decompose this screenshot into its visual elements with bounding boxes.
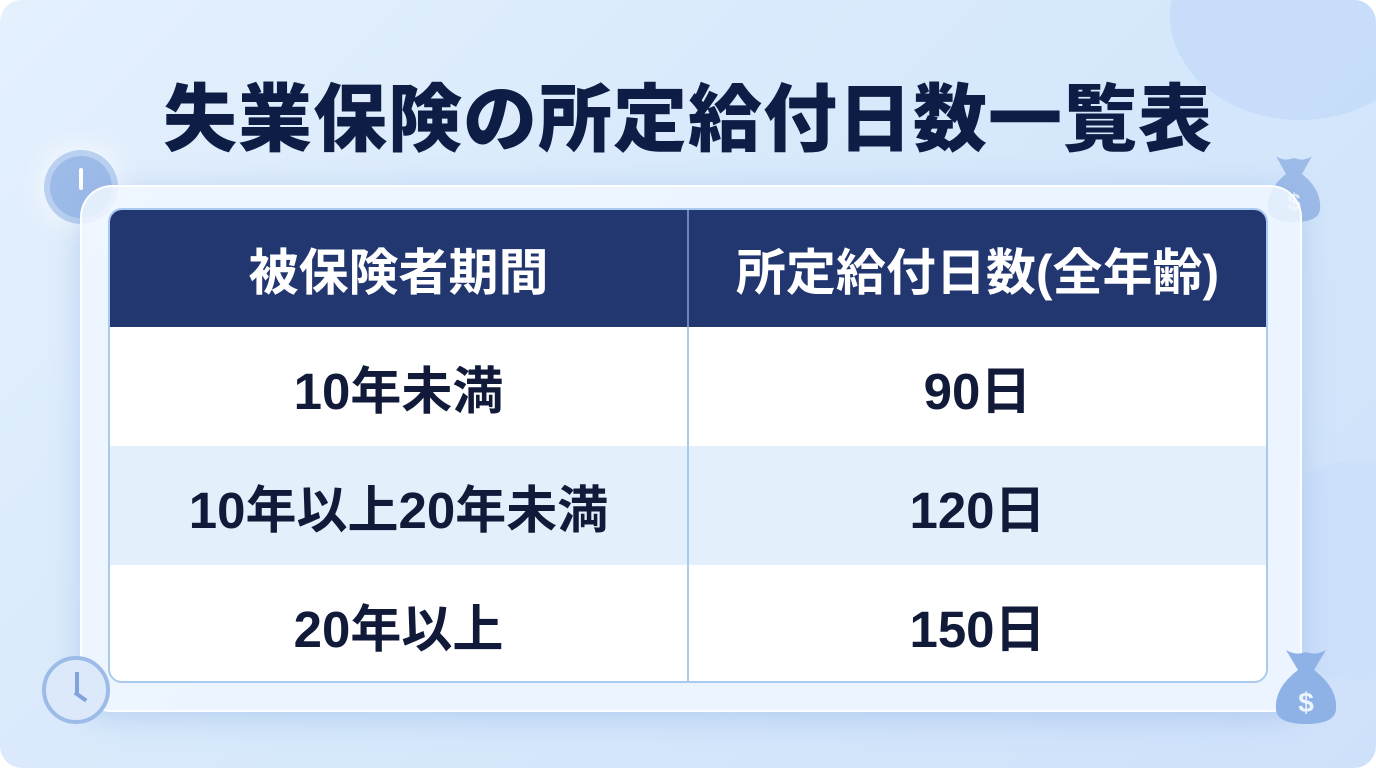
row 1 [110,327,1266,448]
icon: money bag top right: $ [1287,189,1301,216]
title: 失業保険の所定給付日数一覧表 [163,78,1213,161]
row 3: 20年以上 [294,601,503,658]
row 1: 10年未満 [294,362,503,420]
header row [110,210,1266,327]
decorative circle bottom right [1250,460,1376,680]
row 2: 120日 [909,482,1046,538]
header row: 所定給付日数(全年齢) [736,244,1219,300]
row 2 [110,446,1266,567]
icon: clock bottom left [42,656,110,724]
row 2: 10年以上20年未満 [189,482,608,538]
icon: money bag top right [1268,156,1320,222]
decorative circle top right [1170,0,1376,120]
row 3 [110,565,1266,685]
icon: money bag bottom right [1276,650,1336,724]
icon: clock top left [44,150,118,224]
icon: money bag bottom right: $ [1298,687,1314,718]
card [80,185,1302,712]
header row: 被保険者期間 [248,244,548,300]
row 1: 90日 [924,362,1031,420]
row 3: 150日 [909,601,1046,658]
table [108,208,1268,683]
